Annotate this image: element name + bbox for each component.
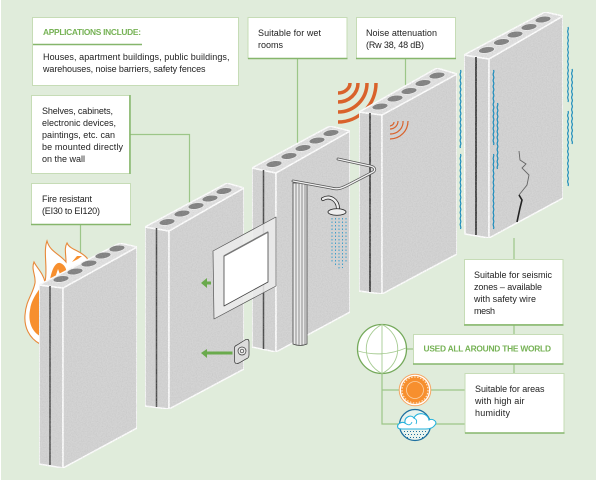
- icon: seismic vibration lines: [460, 27, 572, 229]
- callout: fire resistant: Fire resistant: [42, 194, 92, 204]
- callout: noise attenuation: Noise attenuation: [366, 28, 437, 38]
- callout: seismic zones: with safety wire: [473, 294, 536, 304]
- icon: shower head: [323, 198, 346, 215]
- icon: flames: [25, 241, 100, 344]
- icon: humid cloud: [398, 410, 436, 440]
- icon: large sound waves: [338, 83, 376, 122]
- callout: mounting: [32, 95, 130, 174]
- icon: sun: [399, 374, 431, 406]
- icon: wall crack: [517, 151, 529, 222]
- icon: arrow to socket: [201, 349, 232, 358]
- panel: applications include: [32, 18, 238, 86]
- panel: fire resistant wall element: [39, 243, 137, 468]
- callout: wet rooms: Suitable for wet: [258, 28, 321, 38]
- callout: mounting: be mounted directly: [42, 142, 124, 152]
- panel: wet room wall element: [252, 126, 350, 352]
- connectors: globe to climate icons: [382, 349, 465, 424]
- banner: used all around the world: [413, 334, 564, 364]
- callout: wet rooms: rooms: [258, 40, 284, 50]
- text: application list: [42, 52, 230, 74]
- icon: shower water: [332, 218, 346, 270]
- banner: used all around the world: USED ALL AROUND THE WORLD: [424, 344, 551, 354]
- panel: noise attenuation wall element: [359, 68, 457, 294]
- callout: mounting: electronic devices,: [42, 118, 116, 128]
- callout: seismic zones: [464, 260, 564, 325]
- callout: seismic zones: zones – available: [474, 282, 542, 292]
- callout: fire resistant: [31, 184, 131, 224]
- icon: globe: [358, 324, 406, 374]
- icon: arrow to picture: [201, 278, 211, 288]
- callout: seismic zones: mesh: [474, 306, 495, 316]
- callout: mounting: paintings, etc. can: [42, 130, 115, 140]
- callout: noise attenuation: [356, 18, 456, 58]
- callout: mounting: Shelves, cabinets,: [42, 106, 113, 116]
- icon: picture frame: [213, 217, 276, 319]
- callout: fire resistant: (EI30 to EI120): [42, 206, 100, 216]
- callout: high air humidity: humidity: [475, 408, 510, 418]
- callout: wet rooms: [248, 18, 348, 58]
- callout: mounting: on the wall: [42, 154, 85, 164]
- callout: high air humidity: with high air: [474, 396, 524, 406]
- callout: seismic zones: Suitable for seismic: [474, 270, 552, 280]
- icon: shower curtain: [293, 183, 307, 346]
- panel: wall element with mounted devices: [145, 183, 244, 409]
- callout: high air humidity: Suitable for areas: [475, 384, 545, 394]
- text: application list: warehouses, noise barriers, safety fences: [42, 64, 206, 74]
- panel: seismic wall element: [464, 12, 563, 238]
- icon: wall socket: [234, 339, 249, 364]
- icon: curtain rail: [293, 159, 375, 189]
- text: application list: Houses, apartment buildings, public buildings,: [43, 52, 230, 62]
- heading: applications include: APPLICATIONS INCLUDE:: [43, 27, 141, 37]
- callout: noise attenuation: (Rw 38, 48 dB): [366, 40, 424, 50]
- icon: small sound waves: [390, 121, 408, 139]
- callout: high air humidity: [465, 374, 564, 433]
